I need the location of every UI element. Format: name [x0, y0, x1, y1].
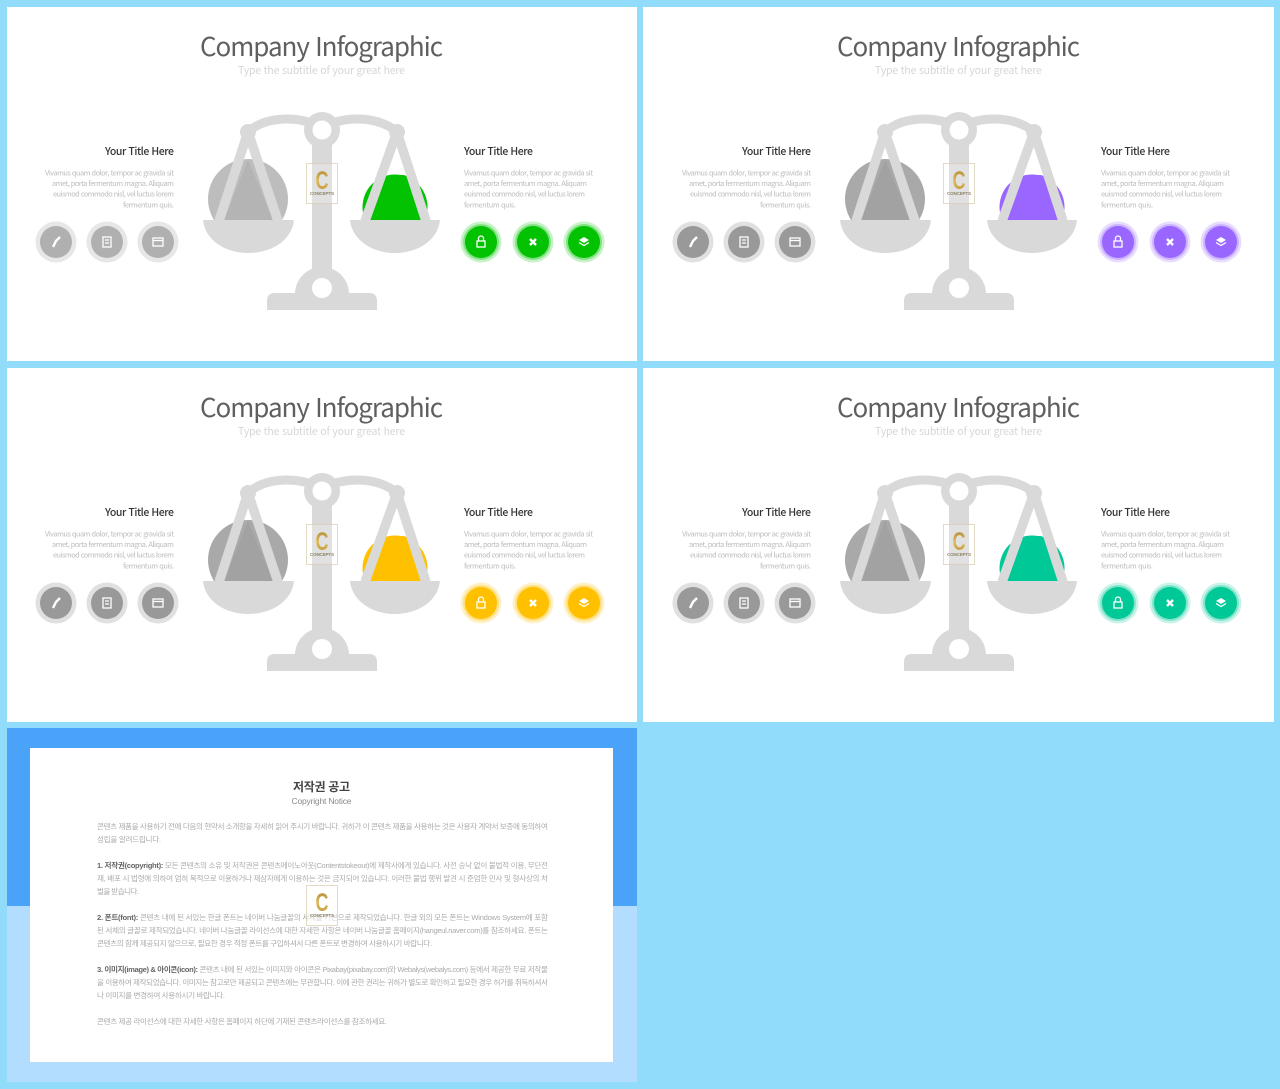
right text block: euismod commodo nisl, vel luctus lorem: [1101, 550, 1222, 560]
left text block: Vivamus quam dolor, tempor ac gravida sit: [45, 168, 174, 178]
section 1: copyright: 재, 배포 시 법령에 의하여 엄히 목적으로 이용하거나 제삼자에게 이용하는 것은 금지되어 있습니다. 이러한 불법 행위 발견 시 준엄한 민사 및 형사상의 처: [97, 873, 548, 883]
title: Company Infographic: [837, 27, 1080, 64]
right text block: [1100, 505, 1230, 572]
left text block: amet, porta fermentum magna. Aliquam: [52, 178, 174, 189]
logo watermark: [306, 524, 338, 564]
left text block: Your Title Here: [741, 505, 811, 520]
right text block: Vivamus quam dolor, tempor ac gravida sit: [1101, 528, 1230, 540]
right text block: [463, 505, 593, 572]
right text block: euismod commodo nisl, vel luctus lorem: [464, 550, 585, 560]
left text block: amet, porta fermentum magna. Aliquam: [52, 539, 174, 550]
balance scale: [840, 473, 1077, 671]
left text block: amet, porta fermentum magna. Aliquam: [689, 539, 811, 550]
subtitle: Type the subtitle of your great here: [238, 63, 405, 78]
logo watermark: C: [316, 528, 328, 556]
right text block: fermentum quis.: [464, 560, 516, 572]
section 2: font: [97, 912, 548, 948]
right text block: fermentum quis.: [1101, 560, 1153, 572]
logo watermark: [306, 164, 338, 204]
closing note: 콘텐츠 제공 라이선스에 대한 자세한 사항은 홈페이지 하단에 기재된 콘텐츠라이선스를 참조하세요.: [97, 1016, 387, 1026]
left grey icons: [672, 582, 816, 624]
right text block: Vivamus quam dolor, tempor ac gravida sit: [464, 168, 593, 178]
left text block: euismod commodo nisl, vel luctus lorem: [53, 188, 174, 200]
left text block: Your Title Here: [741, 144, 811, 159]
subtitle: Type the subtitle of your great here: [875, 424, 1042, 439]
section 3: image and icon: 3. 이미지(image) & 아이콘(icon): 콘텐츠 내에 된 서있는 이미지와 아이콘은 Pixabay(pixabay.com)와 Webalys(webalys.com) 등에서 제공한 무료 저작물: [97, 964, 548, 974]
right text block: Your Title Here: [463, 144, 533, 159]
left text block: fermentum quis.: [760, 200, 811, 210]
left text block: [45, 505, 174, 572]
right text block: Your Title Here: [1100, 144, 1170, 159]
logo watermark: CONCEPTS: [310, 191, 334, 196]
right text block: Your Title Here: [463, 505, 533, 520]
title: Company Infographic: [837, 388, 1080, 425]
panel: purple slide: [643, 7, 1274, 361]
section 3: image and icon: 나 이미지를 변경하여 사용하시기 바랍니다.: [97, 990, 225, 1000]
intro paragraph: 성립을 알려드립니다.: [97, 834, 161, 844]
panel: copyright notice: [7, 728, 637, 1082]
logo watermark: C: [952, 528, 966, 556]
right coloured icons: [1098, 222, 1242, 262]
section 2: font: 콘텐츠의 함께 제공되지 않으므로, 필요한 경우 적정 폰트를 구입하셔서 다른 폰트로 변경하여 사용하시기 바랍니다.: [97, 938, 432, 948]
logo watermark: [944, 164, 974, 204]
left text block: [45, 144, 174, 210]
left text block: Vivamus quam dolor, tempor ac gravida sit: [45, 528, 174, 540]
intro paragraph: 콘텐츠 제품을 사용하기 전에 다음의 현약서 소개항을 자세히 읽어 주시기 바랍니다. 귀하가 이 콘텐츠 제품을 사용하는 것은 사용자 계약서 보증에 동의하여: [97, 821, 548, 831]
title: Company Infographic: [200, 27, 443, 64]
section 2: font: 된 서체의 글꼴로 제작되었습니다. 네이버 나눔글꼴 라이선스에 대한 자세한 사항은 네이버 나눔글꼴 홈페이지(hangeul.naver.com)를 참조하세요. 폰트는: [97, 925, 548, 935]
copyright subheading: Copyright Notice: [292, 796, 352, 806]
section 3: image and icon: 을 이용하여 제작되었습니다. 이미지는 참고로만 제공되고 콘텐츠에는 무관합니다. 이에 관한 권리는 귀하가 별도로 확인하고 필요한 경우 허가를 취득하셔서: [97, 977, 548, 987]
right text block: fermentum quis.: [1101, 200, 1153, 210]
balance scale: [203, 473, 440, 671]
right text block: amet, porta fermentum magna. Aliquam: [1101, 178, 1224, 189]
logo watermark: [306, 886, 338, 926]
subtitle: Type the subtitle of your great here: [238, 424, 405, 439]
section 1: copyright: [97, 860, 548, 896]
logo watermark: CONCEPTS: [947, 552, 971, 557]
panel: green slide: [7, 7, 637, 361]
right text block: euismod commodo nisl, vel luctus lorem: [1101, 188, 1222, 200]
right text block: amet, porta fermentum magna. Aliquam: [1101, 539, 1224, 550]
left text block: fermentum quis.: [123, 200, 174, 210]
left text block: amet, porta fermentum magna. Aliquam: [689, 178, 811, 189]
section 1: copyright: 벌을 받습니다.: [97, 886, 139, 896]
right coloured icons: [1098, 582, 1242, 624]
logo watermark: [944, 524, 974, 564]
copyright heading: 저작권 공고: [293, 779, 350, 794]
left grey icons: [672, 222, 816, 262]
panel: yellow slide: [7, 368, 637, 722]
logo watermark: CONCEPTS: [310, 552, 334, 557]
section 1: copyright: 1. 저작권(copyright): 모든 콘텐츠의 소유 및 저작권은 콘텐츠메이노아웃(Contentstokeout)에 제작사에게 있습니다. 사전 승낙 없이 불법적 이용, 무단전: [97, 860, 548, 870]
logo watermark: CONCEPTS: [947, 191, 971, 196]
left text block: fermentum quis.: [123, 560, 174, 572]
right text block: [463, 144, 593, 210]
left text block: Your Title Here: [104, 505, 174, 520]
right text block: Your Title Here: [1100, 505, 1170, 520]
left text block: Your Title Here: [104, 144, 174, 159]
left grey icons: [36, 222, 178, 262]
right coloured icons: [460, 582, 604, 624]
logo watermark: C: [316, 889, 328, 917]
panel: teal slide: [643, 368, 1274, 722]
right text block: Vivamus quam dolor, tempor ac gravida sit: [1101, 168, 1230, 178]
left text block: [682, 144, 811, 210]
left text block: [682, 505, 811, 572]
right text block: amet, porta fermentum magna. Aliquam: [464, 178, 587, 189]
intro paragraph: [97, 821, 548, 844]
section 3: image and icon: [97, 964, 548, 1000]
logo watermark: C: [316, 167, 328, 195]
left grey icons: [36, 582, 178, 624]
right text block: [1100, 144, 1230, 210]
right coloured icons: [460, 222, 604, 262]
right text block: Vivamus quam dolor, tempor ac gravida sit: [464, 528, 593, 540]
right text block: amet, porta fermentum magna. Aliquam: [464, 539, 587, 550]
logo watermark: CONCEPTS: [310, 913, 334, 918]
section 2: font: 2. 폰트(font): 콘텐츠 내에 된 서있는 한글 폰트는 네이버 나눔글꼴의 서체를 기본으로 제작되었습니다. 한글 외의 모든 폰트는 Windows System에 포함: [97, 912, 548, 922]
title: Company Infographic: [200, 388, 443, 425]
right text block: euismod commodo nisl, vel luctus lorem: [464, 188, 585, 200]
balance scale: [203, 112, 440, 310]
right text block: fermentum quis.: [464, 200, 516, 210]
left text block: euismod commodo nisl, vel luctus lorem: [690, 550, 811, 560]
left text block: Vivamus quam dolor, tempor ac gravida sit: [682, 168, 811, 178]
left text block: fermentum quis.: [760, 560, 811, 572]
left text block: Vivamus quam dolor, tempor ac gravida sit: [682, 528, 811, 540]
left text block: euismod commodo nisl, vel luctus lorem: [53, 550, 174, 560]
logo watermark: C: [952, 167, 966, 195]
left text block: euismod commodo nisl, vel luctus lorem: [690, 188, 811, 200]
balance scale: [840, 112, 1077, 310]
subtitle: Type the subtitle of your great here: [875, 63, 1042, 78]
